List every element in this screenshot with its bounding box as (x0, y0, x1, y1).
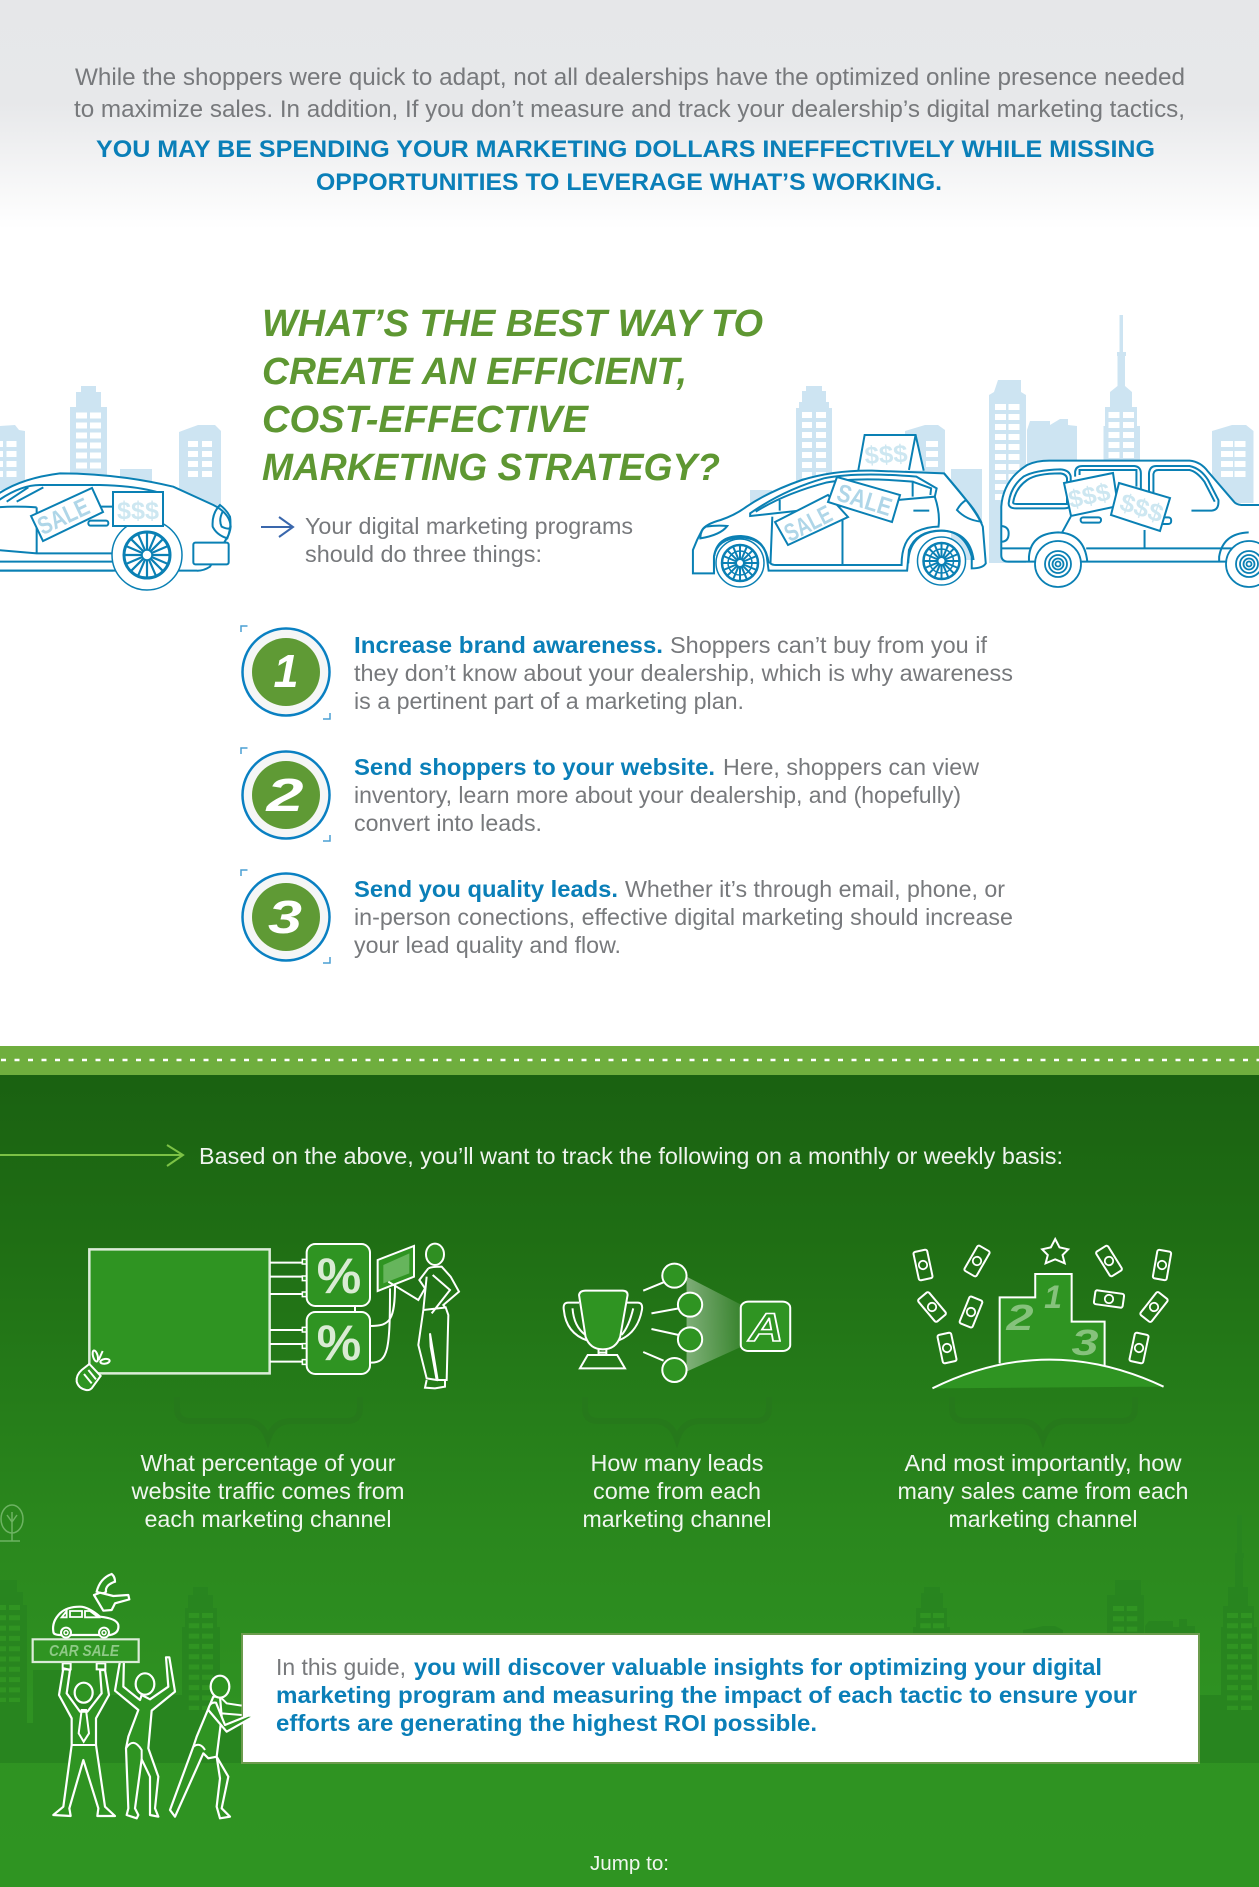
caption: leads: come from each (593, 1478, 761, 1504)
intro highlight: YOU MAY BE SPENDING YOUR MARKETING DOLLARS INEFFECTIVELY WHILE MISSING (96, 136, 1155, 163)
sign: dollars two: $$$ (1116, 488, 1167, 529)
text 3: Whether it’s through email, phone, or (625, 876, 1005, 902)
intro paragraph (74, 64, 1185, 123)
percent sign bottom: % (317, 1315, 361, 1371)
text 3: in-person conections, effective digital marketing should increase (354, 904, 1013, 930)
sign: roof dollars: $$$ (864, 440, 908, 470)
intro highlight (96, 136, 1155, 196)
text 3 (354, 876, 1013, 958)
text 1: they don’t know about your dealership, which is why awareness (354, 660, 1013, 686)
text: tracking lead-in: Based on the above, you’ll want to track the following on a monthly or weekly basis: (199, 1143, 1063, 1169)
icon: tree (0, 1505, 23, 1541)
badge 1 (241, 626, 330, 719)
badge 2: 2 (265, 769, 304, 821)
sign: dollars: $$$ (117, 497, 159, 525)
letter grade: A (747, 1306, 784, 1350)
panel: intro band (0, 0, 1259, 229)
sign text: CAR SALE (49, 1643, 120, 1660)
text: three things lead-in (305, 513, 633, 567)
text 3: your lead quality and flow. (354, 932, 621, 958)
badge 3: 3 (268, 891, 303, 943)
brace: traffic (177, 1397, 360, 1439)
text 2: Send shoppers to your website. (354, 754, 715, 780)
text 2: convert into leads. (354, 810, 542, 836)
stitched band (0, 1046, 1259, 1075)
badge 3 (241, 870, 330, 963)
icon: trophy leads (564, 1264, 790, 1382)
caption: traffic (130, 1450, 405, 1532)
sign: dollars one: $$$ (1066, 478, 1113, 514)
heading: MARKETING STRATEGY? (262, 447, 720, 489)
list item 1 (241, 626, 1013, 719)
intro paragraph: While the shoppers were quick to adapt, not all dealerships have the optimized online presence needed (75, 64, 1185, 91)
sign: dollars (113, 492, 163, 526)
podium numbers (1005, 1279, 1098, 1363)
text 1: is a pertinent part of a marketing plan. (354, 688, 744, 714)
text 2: Here, shoppers can view (723, 754, 979, 780)
person 1 (53, 1663, 115, 1816)
text: three things lead-in: Your digital marketing programs (305, 513, 633, 539)
text: jump to: Jump to: (590, 1853, 669, 1875)
panel: green tracking section (0, 1046, 1259, 1887)
text 1: Increase brand awareness. (354, 632, 663, 658)
intro paragraph: to maximize sales. In addition, If you don’t measure and track your dealership’s digital marketing tactics, (74, 96, 1185, 123)
sign: dollars two (1111, 483, 1170, 531)
heading (262, 303, 763, 489)
illustration: people lifting car sale sign (33, 1574, 255, 1818)
callout: guide summary: marketing program and measuring the impact of each tactic to ensure your (276, 1682, 1137, 1708)
callout: guide summary: In this guide, (276, 1654, 406, 1680)
caption: traffic: website traffic comes from (130, 1478, 405, 1504)
brace: sales (952, 1397, 1135, 1439)
percent sign top: % (317, 1248, 361, 1304)
illustration: dark skyline (0, 1515, 1259, 1763)
caption: leads (582, 1450, 772, 1532)
illustration: hatchback with sale signs (693, 435, 986, 587)
wheel (112, 520, 182, 590)
list item 2 (241, 748, 979, 841)
caption: sales: And most importantly, how (904, 1450, 1182, 1476)
list item 3 (241, 870, 1013, 963)
person 3 (170, 1676, 255, 1818)
podium numbers: 3 (1072, 1322, 1098, 1363)
text 3: Send you quality leads. (354, 876, 618, 902)
skyline windows (3, 1605, 1246, 1710)
callout: guide summary: efforts are generating the highest ROI possible. (276, 1710, 817, 1736)
sign: SALE: SALE (33, 493, 94, 541)
text 1 (354, 632, 1013, 714)
arrow: tracking lead-in (0, 1145, 183, 1166)
text 2: inventory, learn more about your dealership, and (hopefully) (354, 782, 961, 808)
arrow: intro to list (261, 517, 293, 537)
caption: leads: How many leads (590, 1450, 764, 1476)
intro highlight: OPPORTUNITIES TO LEVERAGE WHAT’S WORKING. (316, 169, 942, 196)
dollar bills (913, 1245, 1171, 1364)
podium numbers: 2 (1005, 1297, 1034, 1338)
illustration: right skyline (750, 315, 1254, 563)
badge 2 (241, 748, 330, 841)
caption: leads: marketing channel (582, 1506, 772, 1532)
car on sign (53, 1607, 118, 1638)
text 1: Shoppers can’t buy from you if (670, 632, 988, 658)
caption: sales (898, 1450, 1188, 1532)
person 2 (115, 1657, 175, 1818)
caption: traffic: What percentage of your (140, 1450, 396, 1476)
sign: SALE door: SALE (780, 500, 837, 548)
illustration: left car with sale signs (0, 473, 231, 590)
illustration: van with price signs (1001, 461, 1259, 587)
podium numbers: 1 (1044, 1279, 1062, 1315)
caption: sales: many sales came from each (898, 1478, 1188, 1504)
keys (94, 1574, 129, 1611)
icon: traffic percentage (77, 1244, 459, 1390)
heading: CREATE AN EFFICIENT, (262, 351, 687, 393)
badge 1: 1 (274, 645, 298, 697)
heading: COST-EFFECTIVE (262, 399, 590, 441)
caption: traffic: each marketing channel (144, 1506, 392, 1532)
brace: leads (585, 1397, 769, 1439)
caption: sales: marketing channel (948, 1506, 1138, 1532)
callout: guide summary: you will discover valuable insights for optimizing your digital (414, 1654, 1102, 1680)
illustration: left skyline (0, 386, 221, 515)
text 2 (354, 754, 979, 836)
sign: SALE window: SALE (833, 479, 895, 522)
text: three things lead-in: should do three things: (305, 541, 542, 567)
callout: guide summary (242, 1634, 1199, 1763)
icon: sales podium (913, 1239, 1171, 1388)
heading: WHAT’S THE BEST WAY TO (262, 303, 763, 345)
